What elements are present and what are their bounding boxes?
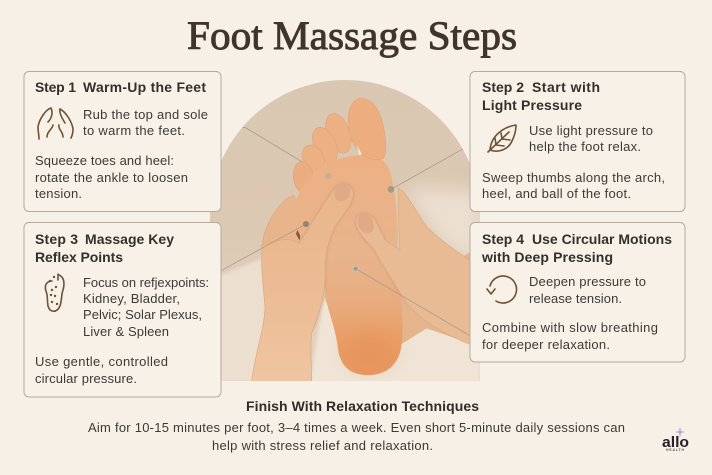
panel: step 1: to warm the feet. [83,123,185,138]
panel: step 2: help the foot relax. [529,139,641,154]
panel: step 3: circular pressure. [35,371,137,386]
text: closing advice [88,420,625,453]
photo: hands massaging a foot in an arch frame [210,80,480,383]
panel: step 2: Step 2 [482,79,524,95]
text: closing advice: help with stress relief and relaxation. [212,438,433,453]
panel: step 4: with Deep Pressing [481,249,613,265]
panel: step 2 [470,72,685,212]
foot [291,98,403,375]
panel: step 3: Liver & Spleen [83,324,169,339]
panel: step 4: Deepen pressure to [529,274,646,289]
panel: step 2: Sweep thumbs along the arch, [482,170,665,185]
panel: step 4 [470,222,685,362]
icon: circular arrow [487,276,517,303]
icon: feather [488,125,516,152]
panel: step 4: for deeper relaxation. [482,337,610,352]
panel: step 3: Pelvic; Solar Plexus, [83,307,202,322]
panel: step 1 [24,72,221,212]
panel: step 3: Step 3 [35,231,78,247]
logo: allo health: allo [662,434,689,451]
leader lines [222,126,470,336]
panel: step 1: Rub the top and sole [83,107,208,122]
panel: step 1: tension. [35,186,82,201]
heading: finish with relaxation: Finish With Relaxation Techniques [246,398,479,414]
panel: step 3: Focus on refjexpoints: [83,275,209,290]
logo: allo health: HEALTH [666,448,684,452]
panel: step 4: Use Circular Motions [532,231,672,247]
panel: step 3 [24,222,221,397]
panel: step 1: Warm-Up the Feet [83,79,206,95]
icon: warming hands [38,108,73,139]
panel: step 4: Combine with slow breathing [482,320,658,335]
panel: step 3: Use gentle, controlled [35,354,168,369]
far hand and thumb [356,188,472,345]
far arm behind heel [401,252,470,344]
panel: step 2: Start with [532,79,600,95]
logo: allo health [662,427,689,452]
far hand finger behind [261,194,306,247]
panel: step 2: Use light pressure to [529,123,653,138]
panel: step 1: Squeeze toes and heel: [35,153,174,168]
panel: step 1: rotate the ankle to loosen [35,170,188,185]
panel: step 4: Step 4 [482,231,524,247]
hand shadow on foot [300,184,386,331]
panel: step 3: Kidney, Bladder, [83,291,180,306]
icon: foot reflex map [45,274,64,311]
panel: step 3: Massage Key [85,231,174,247]
text: closing advice: Aim for 10-15 minutes per foot, 3–4 times a week. Even short 5-minute daily sessions can [88,420,625,435]
panel: step 4: release tension. [529,291,622,306]
near hand and thumb [252,183,353,382]
panel: step 2: Light Pressure [482,97,582,113]
panel: step 3: Reflex Points [35,249,123,265]
panel: step 1: Step 1 [35,79,76,95]
title: Foot Massage Steps [187,13,517,58]
panel: step 2: heel, and ball of the foot. [482,186,631,201]
